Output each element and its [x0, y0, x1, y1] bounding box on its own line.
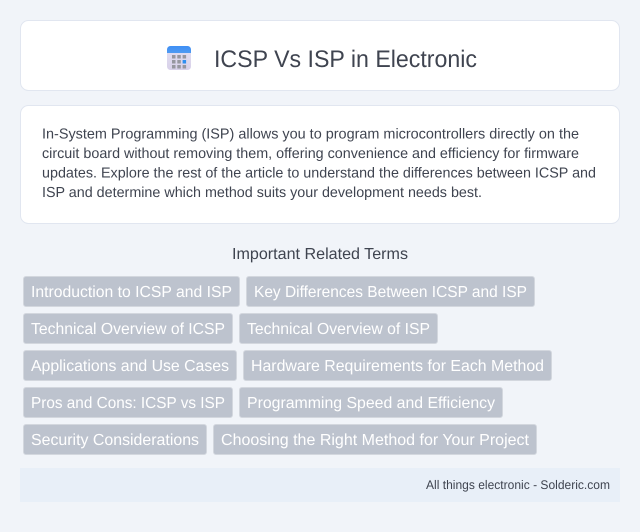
chip: introduction: [24, 276, 240, 306]
chip: choosing the right method: Choosing the Right Method for Your Project: [221, 432, 530, 449]
text block: description: updates. Explore the rest of the article to understand the differences between ICSP and: [42, 166, 596, 182]
panel: title card: [20, 20, 620, 90]
text block: description: In-System Programming (ISP) allows you to program microcontrollers directly on the: [42, 126, 579, 142]
chip: key differences: [246, 276, 534, 306]
chip: introduction: Introduction to ICSP and ISP: [31, 284, 232, 301]
heading: important related terms: Important Related Terms: [232, 246, 408, 263]
text block: description: circuit board without removing them, offering convenience and efficiency for firmware: [42, 146, 579, 162]
chip: programming speed: Programming Speed and Efficiency: [247, 395, 495, 412]
chip: hardware requirements: Hardware Requirements for Each Method: [251, 358, 544, 375]
footer: [20, 468, 620, 502]
text block: description: [42, 126, 596, 201]
chip: programming speed: [240, 388, 502, 418]
title: ICSP Vs ISP in Electronic: [214, 46, 477, 73]
chip: hardware requirements: [244, 350, 552, 380]
chip: technical overview of ISP: [240, 314, 438, 344]
footer: All things electronic - Solderic.com: [426, 478, 610, 492]
chip: applications: Applications and Use Cases: [31, 358, 229, 375]
chip: security: [24, 424, 206, 454]
chip: technical overview of ICSP: [24, 314, 232, 344]
chip: pros and cons: [24, 388, 232, 418]
chip: applications: [24, 350, 236, 380]
chip: key differences: Key Differences Between ICSP and ISP: [254, 284, 527, 301]
chip: security: Security Considerations: [31, 432, 199, 449]
chip: choosing the right method: [214, 424, 536, 454]
chip: technical overview of ISP: Technical Overview of ISP: [247, 321, 430, 338]
icon: calendar chip grid: [167, 46, 191, 70]
panel: related term chips: [24, 276, 552, 454]
chip: technical overview of ICSP: Technical Overview of ICSP: [31, 321, 225, 338]
panel: description card: [20, 106, 620, 224]
chip: pros and cons: Pros and Cons: ICSP vs ISP: [31, 395, 225, 412]
text block: description: ISP and determine which method suits your development needs best.: [42, 185, 482, 201]
